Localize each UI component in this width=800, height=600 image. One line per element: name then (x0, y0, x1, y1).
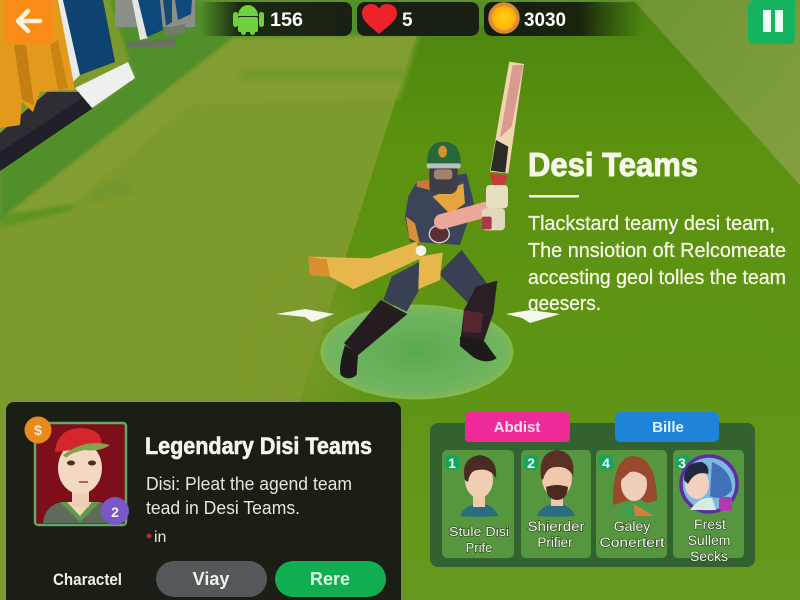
card 2: 2 (527, 455, 535, 471)
left shoe (340, 345, 358, 378)
panel body text: Disi: Pleat the agend team (146, 474, 352, 494)
pause button (748, 0, 795, 44)
card 1: 1 (448, 455, 456, 471)
tab: Bille (615, 412, 719, 442)
panel title: Legendary Disi Teams (145, 433, 372, 460)
right shoe (460, 337, 497, 361)
back button (5, 0, 53, 44)
head and helmet (427, 142, 461, 194)
right pad (461, 281, 497, 341)
torso (405, 173, 474, 245)
card 3: 4 (602, 455, 610, 471)
badge: orange (24, 416, 52, 444)
description text: Tlackstard teamy desi team, (528, 213, 775, 235)
card 4: Sullem (688, 532, 730, 548)
badge: level 2 (101, 497, 129, 525)
tab: Bille: Bille (652, 419, 684, 436)
heading underline (529, 195, 579, 198)
arm (442, 209, 487, 222)
panel body text (146, 474, 352, 518)
badge: orange: $ (34, 422, 42, 438)
card 1: Stule Disi (449, 524, 509, 539)
description text (528, 213, 786, 315)
stadium stage with curtains and banners (0, 0, 195, 171)
portrait (35, 423, 126, 525)
arrow: left (276, 309, 334, 322)
card 4: 3 (678, 455, 686, 471)
button: Viay: Viay (193, 569, 229, 589)
card 2 (521, 450, 591, 558)
card 2: Shierder (528, 519, 585, 534)
icon: heart (362, 4, 397, 34)
card 4: Secks (690, 548, 728, 564)
counter: hearts 5 (357, 2, 479, 36)
batsman (308, 62, 524, 378)
left leg (383, 262, 420, 312)
platform under batsman (322, 306, 512, 398)
card 1: Prife (466, 540, 492, 555)
icon: back arrow (18, 11, 40, 31)
bat (490, 62, 524, 187)
icon: android robot (233, 5, 264, 35)
card 4: Frest (694, 516, 726, 532)
badge: level 2: 2 (111, 504, 119, 520)
button: Viay (156, 561, 267, 597)
icon: coin (490, 4, 518, 32)
value: 156: 156 (270, 10, 303, 31)
description text: geesers. (528, 293, 601, 315)
description text: accesting geol tolles the team (528, 267, 786, 289)
left pad (344, 300, 407, 355)
tab: Abdist: Abdist (494, 419, 540, 436)
card 3: Galey (614, 518, 650, 534)
card 4 (673, 450, 744, 564)
tag: in: in (154, 529, 166, 546)
panel: legendary teams (6, 402, 401, 600)
button: Rere (275, 561, 386, 597)
panel: team selection (430, 412, 755, 567)
panel body text: tead in Desi Teams. (146, 498, 300, 518)
card 3 (596, 450, 667, 558)
value: 3030: 3030 (524, 10, 566, 31)
value: 5: 5 (402, 10, 413, 31)
tag: in (146, 529, 166, 546)
right leg (438, 250, 488, 310)
sash (308, 242, 443, 289)
gloves (482, 185, 508, 230)
card 2: Prifier (537, 535, 573, 550)
card 1 (442, 450, 514, 558)
tab: Abdist (465, 412, 570, 442)
button: Rere: Rere (310, 569, 350, 589)
counter: coins 3030 (484, 2, 644, 36)
card 3: Conertert (600, 535, 665, 550)
arrow: right (506, 310, 560, 323)
description text: The nnsiotion oft Relcomeate (528, 240, 786, 262)
heading: Desi Teams: Desi Teams (528, 146, 698, 183)
counter: android 156 (200, 2, 352, 36)
label: character: Charactel (53, 570, 122, 589)
